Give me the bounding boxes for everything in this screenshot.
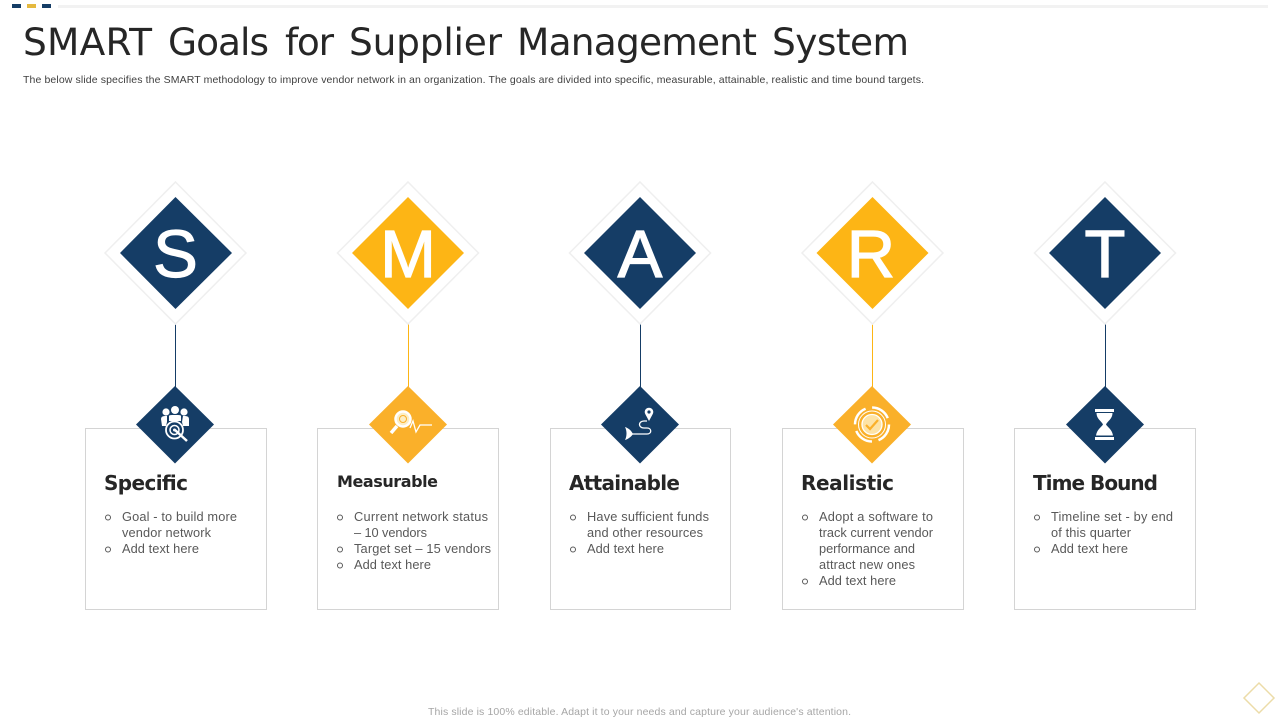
title: SMART [23,20,153,64]
bullet list: Measurable: – 10 vendors [354,525,427,540]
connector: R [872,323,874,388]
footer note: This slide is 100% editable. Adapt it to your needs and capture your audience's attention. [428,706,851,718]
bullet list: Time Bound [1034,509,1173,556]
card: Specific [86,428,266,610]
title: for [285,20,335,64]
bullet list: Attainable: Add text here [587,541,664,556]
letter diamond: R [802,182,943,324]
icon diamond: check in rings [833,386,911,464]
top decoration bar [12,4,1268,8]
connector: A [640,323,642,388]
bullet list: Realistic: Add text here [819,573,896,588]
card: Time Bound [1014,428,1196,610]
icon diamond: people and target [136,386,214,464]
letter diamond: A: A [618,217,663,292]
bullet list: Attainable: and other resources [587,525,703,540]
bullet list: Realistic: attract new ones [819,557,915,572]
heading: Time Bound: Time Bound [1033,471,1158,495]
bullet list: Specific: vendor network [122,525,212,540]
title: Supplier [349,20,503,64]
letter diamond: S [105,182,246,324]
column: Time Bound [1014,182,1196,610]
letter diamond: M: M [380,217,436,292]
icon diamond: magnifier with pulse [369,386,447,464]
title [23,20,909,64]
bullet list: Time Bound: Add text here [1051,541,1128,556]
bullet list: Specific: Add text here [122,541,199,556]
bullet list: Time Bound: of this quarter [1051,525,1132,540]
heading: Specific: Specific [104,471,188,495]
bullet list: Realistic: performance and [819,541,915,556]
letter diamond: S: S [153,217,198,292]
bullet list: Attainable: Have sufficient funds [587,509,709,524]
card: Attainable [550,428,730,610]
bullet list: Realistic: Adopt a software to [819,509,933,524]
icon diamond: hourglass [1066,386,1144,464]
subtitle: The below slide specifies the SMART methodology to improve vendor network in an organization. The goals are divided into specific, measurable, attainable, realistic and time bound targets. [23,74,924,86]
connector: S [174,323,176,388]
icon diamond: route with location pin [601,386,679,464]
letter diamond: T [1034,182,1176,324]
bullet list: Measurable: Current network status [354,509,488,524]
column: Specific [86,182,266,610]
bullet list: Realistic: track current vendor [819,525,934,540]
letter diamond: T: T [1085,217,1125,292]
connector: M [408,323,410,388]
column: Realistic [782,182,964,610]
bullet list: Attainable [570,509,709,556]
title: Goals [168,20,269,64]
heading: Realistic: Realistic [801,471,894,495]
letter diamond: A [570,182,710,324]
bullet list: Measurable: Add text here [354,557,431,572]
bullet list: Realistic [802,509,934,588]
title: System [772,20,909,64]
bullet list: Specific [106,509,237,556]
heading: Attainable: Attainable [569,471,680,495]
title: Management [517,20,757,64]
card: Realistic [782,428,964,610]
corner diamond [1244,683,1274,713]
bullet list: Time Bound: Timeline set - by end [1051,509,1173,524]
heading: Measurable: Measurable [337,472,438,491]
connector: T [1104,323,1106,388]
bullet list: Measurable: Target set – 15 vendors [354,541,491,556]
letter diamond: R: R [847,217,895,292]
bullet list: Measurable [338,509,491,572]
column: Attainable [550,182,730,610]
card: Measurable [318,428,498,610]
bullet list: Specific: Goal - to build more [122,509,237,524]
letter diamond: M [338,182,478,324]
column: Measurable [318,182,498,610]
